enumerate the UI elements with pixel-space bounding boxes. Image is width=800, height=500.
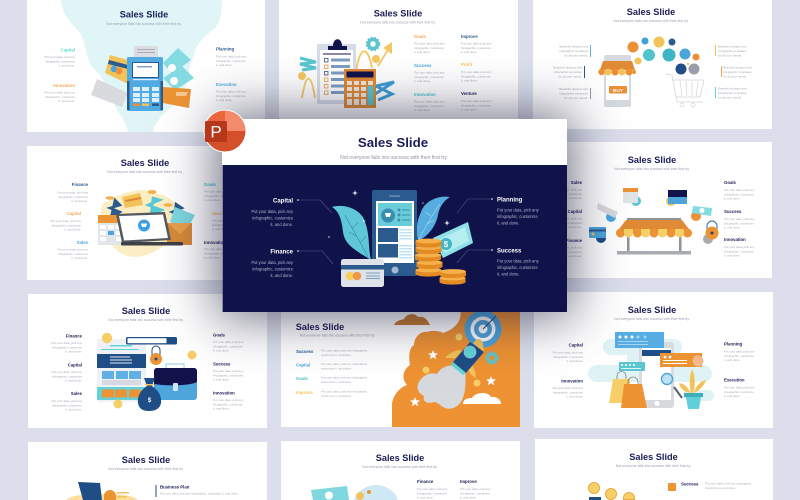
slide card: bottom right success: Not everyone falls into success with their first try. [616,464,691,468]
text: right labels: it, and done. [213,378,230,382]
text: Success: Put your data, pick any [497,258,540,264]
text: left labels: infographic, customize [58,252,88,256]
text: right labels: infographic, customize [212,223,242,227]
text: Innovation: Put your data, pick any [44,90,75,94]
slide card: bottom centre finance [281,441,520,500]
text: column one labels: it, and done. [414,108,431,112]
text: finance and improve: it, and done. [417,496,434,500]
slide card: top right online shop [533,0,772,129]
text: column one labels: Put your data, pick any [414,100,445,104]
text: right labels: it, and done. [204,198,221,202]
drop shadow behind main slide [222,119,567,312]
text: feature rows: Put your data, pick any infographic, [321,390,368,394]
text: column one labels: it, and done. [414,50,431,54]
text: Planning: Put your data, pick any [216,54,247,58]
text: Capital: it, and done. [270,222,293,227]
text: right labels: it, and done. [724,394,741,398]
text: column one labels: it, and done. [414,79,431,83]
text: right labels: infographic, customize [213,402,243,406]
text: column one labels: infographic, customize [414,104,444,108]
illustration: phone shop with bubbles and cart [598,36,704,107]
text: column one labels: infographic, customize [414,46,444,50]
text: column two labels: it, and done. [461,50,478,54]
text: right labels: infographic, customize [204,194,234,198]
text: column two labels: Put your data, pick any [461,42,492,46]
text: left labels: infographic, customize [552,221,582,225]
slide card: top centre clipboard and calculator [279,0,518,119]
text: left labels: infographic, customize [552,250,582,254]
text: Capital [251,198,294,227]
text: left notes: Beautiful designs and [559,44,588,48]
slide card: bottom right success [535,439,773,500]
text: left labels: it, and done. [65,378,82,382]
text: finance and improve [417,479,491,500]
slide card: lower right shopping reviews: Sales Slide [628,305,676,315]
illustration: laptop, calendar and envelope [98,190,195,257]
text: Capital: infographic, customize [45,59,75,63]
text: Innovation: infographic, customize [45,95,75,99]
slide card: top centre clipboard and calculator: Sales Slide [374,8,422,18]
text: right labels: infographic, customize [724,221,754,225]
text: left labels: Put your data, pick any [51,399,82,403]
text: left labels: infographic, customize [552,192,582,196]
text: column one labels [414,34,445,112]
text: left labels: infographic, customize [52,345,82,349]
text: right labels: infographic, customize [724,192,754,196]
text: feature rows: customize it, and done. [321,366,352,370]
text: left labels: Sales [571,180,583,185]
text: Finance [251,250,294,278]
text: Success [497,248,540,276]
illustration: payment terminal with cards and cash [91,46,194,111]
text: finance and improve: Improve [460,479,477,484]
slide card: top right online shop: Sales Slide [627,7,675,17]
slide card: middle right market stall [533,142,772,278]
text: column two labels: Profit [461,62,473,67]
text: right labels: Success [724,209,742,214]
illustration: cash and coins [311,485,398,500]
slide card: lower centre rocket [281,290,520,427]
text: left labels: Put your data, pick any [552,350,583,354]
text: feature rows: Put your data, pick any infographic, [321,376,368,380]
illustration: phone shop, leaves, card, cash and coins [328,190,473,287]
text: right labels: infographic, customize [213,344,243,348]
text: column one labels: Innovation [414,92,436,97]
slide card: bottom centre finance: Not everyone falls into success with their first try. [362,465,438,469]
text: left labels: it, and done. [71,256,88,260]
text: right notes: infographic templates [718,91,747,95]
text: left labels: it, and done. [566,359,583,363]
text: Execution: infographic, customize [216,94,246,98]
text: left labels: Finance [72,182,89,187]
illustration: phone shop, leaves, card, cash and coins: $ [444,240,449,249]
text: right labels: Innovation [204,240,226,245]
text: left labels: Put your data, pick any [51,370,82,374]
text: column two labels: Put your data, pick any [461,70,492,74]
illustration: website, briefcase and money bag: $ [148,398,152,404]
text: left labels: Capital [568,209,582,214]
slide card: bottom left business plan [28,442,267,500]
slide card: lower right shopping reviews [534,292,773,428]
slide card: bottom right success: Sales Slide [629,452,678,462]
text: right labels: Put your data, pick any [213,398,244,402]
text: Execution: Put your data, pick any [216,90,247,94]
text: column two labels: it, and done. [461,108,478,112]
slide card: middle left laptop: Sales Slide [121,158,169,168]
text: Capital: Put your data, pick any [251,209,294,214]
text: right labels [213,332,244,410]
illustration: clipboard, calculator and growth arrow [298,38,394,108]
text: feature rows [296,348,368,398]
text: column two labels: infographic, customize [461,103,491,107]
text: Execution [216,82,247,102]
text: left labels: infographic, customize [553,390,583,394]
text: left labels [552,342,583,398]
text: column one labels: Put your data, pick any [414,70,445,74]
text: left notes: infographic templates [559,92,588,96]
text: Execution: it, and done. [216,98,233,102]
text: left labels: it, and done. [71,199,88,203]
slide card: middle left laptop [27,146,265,280]
text: left labels: it, and done. [65,350,82,354]
text: Capital: infographic, customize [252,216,294,220]
slide card: middle right market stall: Sales Slide [628,155,676,165]
text: column one labels: Goals [414,34,427,39]
text: Finance: Put your data, pick any [251,260,294,265]
text: column one labels: Put your data, pick any [414,42,445,46]
illustration: stall with icons around it [589,188,718,254]
text: Finance: Finance [270,250,294,256]
text: left labels: Put your data, pick any [551,246,582,250]
text: business plan: Put your data, pick any infographic, customize it, and done. [160,492,239,496]
text: feature rows: Put your data, pick any infographic, [321,348,368,352]
text: left labels: it, and done. [64,228,81,232]
text: left labels: Capital [68,362,82,368]
slide card: middle right market stall: Not everyone falls into success with their first try. [614,167,690,171]
text: column one labels: Success [414,63,432,68]
illustration: phone shop with bubbles and cart: BUY [613,88,624,94]
text: right notes: Beautiful designs and [718,44,747,48]
text: right labels: Success [212,211,230,216]
text: right labels: Innovation [213,390,235,396]
text: right labels: Put your data, pick any [724,350,755,354]
text: right labels: it, and done. [724,254,741,258]
slide card: lower left website and briefcase [28,294,267,428]
text: left labels: it, and done. [565,196,582,200]
text: column two labels [461,34,492,112]
text: Planning: it, and done. [497,220,520,226]
text: Innovation: it, and done. [58,99,75,103]
text: left notes: Beautiful designs and [553,66,582,70]
text: left notes: infographic templates [553,70,582,74]
text: feature rows: customize it, and done. [321,380,352,384]
text: left labels: infographic, customize [553,355,583,359]
text: right labels: Put your data, pick any [724,386,755,390]
text: left notes: for all your needs. [564,54,588,58]
text: right labels: Put your data, pick any [212,218,243,222]
text: right labels: infographic, customize [724,390,754,394]
slide card: bottom left business plan: Sales Slide [122,455,170,465]
text: left labels: it, and done. [565,225,582,229]
text: success row [668,482,752,491]
text: Execution: Execution [216,82,237,87]
text: right labels: Put your data, pick any [724,245,755,249]
text: right labels: Goals [213,332,226,338]
slide card: middle left laptop: Not everyone falls into success with their first try. [107,170,183,174]
slide card: top centre clipboard and calculator: Not everyone falls into success with their first try. [360,20,436,24]
text: left labels: Capital [67,211,81,216]
text: feature rows: Success [296,349,314,354]
illustration: plan document and coin [66,482,138,500]
subtitle: Not everyone falls into success with their first try. [340,155,448,161]
text: right notes: for all your needs. [718,96,742,100]
text: feature rows: Put your data, pick any infographic, [321,362,368,366]
text: left labels: infographic, customize [51,223,81,227]
text: finance and improve: Put your data, pick any [460,487,491,491]
text: column two labels: infographic, customize [461,74,491,78]
panel: main featured slide [222,119,567,312]
text: left labels: infographic, customize [52,374,82,378]
text: Planning [497,198,540,226]
text: left labels: Put your data, pick any [551,188,582,192]
text: Planning: Planning [497,198,523,204]
text: right labels: Put your data, pick any [213,340,244,344]
slide card: top left payment terminal: Not everyone falls into success with their first try. [106,22,182,26]
illustration: phone with reviews, bags and plant [588,332,714,409]
text: right labels: Goals [724,180,737,185]
text: Success: it, and done. [497,272,520,276]
text: left notes: for all your needs. [558,74,582,78]
text: left labels: infographic, customize [58,195,88,199]
text: right labels [724,342,755,398]
text: left labels: Sales [71,391,83,396]
text: success row: Put your data, pick any infographic, [705,482,752,486]
text: right labels: Put your data, pick any [724,217,755,221]
slide card: top left payment terminal [27,0,265,132]
text: right labels: it, and done. [213,348,230,352]
text: Planning: Planning [216,46,235,52]
text: left labels: Put your data, pick any [57,248,88,252]
text: right labels: it, and done. [724,226,741,230]
text: Innovation: Innovation [53,83,75,88]
text: left labels: it, and done. [65,408,82,412]
text: finance and improve: infographic, customize [417,491,447,495]
text: Finance: it, and done. [270,273,293,278]
text: right labels: infographic, customize [204,251,234,255]
text: left labels: Put your data, pick any [50,219,81,223]
text: left labels: it, and done. [565,254,582,258]
text: right labels: Innovation [724,237,746,242]
slide card: bottom centre finance: Sales Slide [376,453,424,463]
text: right notes: Beautiful designs and [718,86,747,90]
slide card: lower centre rocket: Not everyone falls into success with their first try. [300,334,375,338]
text: left labels: Finance [566,238,583,243]
text: left labels [551,180,583,258]
connector lines [297,198,493,264]
text: success row: customize it, and done. [705,486,736,490]
text: column two labels: Put your data, pick any [461,99,492,103]
text: left labels: Finance [66,334,83,338]
text: right labels: it, and done. [724,196,741,200]
text: left labels: Sales [77,240,89,245]
text: left notes: Beautiful designs and [559,87,588,91]
text: right notes: infographic templates [718,49,747,53]
text: Capital: it, and done. [58,64,75,68]
title: Sales Slide [358,135,428,150]
text: left labels: Put your data, pick any [51,341,82,345]
text: right notes: for all your needs. [718,54,742,58]
text: feature rows: customize it, and done. [321,394,352,398]
text: feature rows: Improve [296,390,313,395]
slide card: bottom left business plan: Not everyone falls into success with their first try. [108,467,184,471]
text: Planning: Put your data, pick any [497,208,540,212]
text: right labels: Goals [204,182,217,187]
text: right notes: infographic templates [723,70,752,74]
text: business plan [156,484,239,497]
text: business plan: Business Plan [160,484,190,490]
icon: PowerPoint badge: P [210,122,222,142]
text: right labels: Put your data, pick any [204,190,235,194]
icon: PowerPoint badge [204,110,246,152]
text: finance and improve: Put your data, pick any [417,487,448,491]
text: left notes: infographic templates [559,49,588,53]
text: column two labels: Venture [461,91,477,96]
text: right labels: infographic, customize [724,249,754,253]
text: column two labels: it, and done. [461,78,478,82]
text: feature rows: Goals [296,376,309,381]
text: left notes [553,44,591,100]
illustration: website, briefcase and money bag [97,333,197,411]
text: Capital: Capital [61,48,75,52]
text: Planning: infographic, customize [216,59,246,63]
text: column one labels: infographic, customize [414,75,444,79]
text: success row: Success [681,482,699,486]
text: right labels [724,180,755,258]
text: right notes: for all your needs. [723,74,747,78]
text: right labels: Success [213,362,231,366]
text: Planning [216,46,247,67]
text: left labels: Capital [569,342,583,348]
text: Planning: it, and done. [216,63,233,67]
slide card: lower right shopping reviews: Not everyone falls into success with their first try. [614,317,690,321]
text: right notes [715,44,752,100]
text: left labels [51,334,83,412]
text: left labels: it, and done. [566,394,583,398]
text: Innovation [44,83,75,103]
text: left labels: Innovation [561,378,583,384]
text: right labels: it, and done. [213,406,230,410]
text: finance and improve: Finance [417,479,434,484]
text: right labels: it, and done. [204,256,221,260]
text: left notes: for all your needs. [564,96,588,100]
text: left labels: Put your data, pick any [551,216,582,220]
text: right labels: Put your data, pick any [213,369,244,373]
text: left labels [50,182,89,260]
text: finance and improve: it, and done. [460,496,477,500]
text: right labels: infographic, customize [724,354,754,358]
text: left labels: infographic, customize [52,403,82,407]
text: left labels: Put your data, pick any [57,190,88,194]
text: Finance: infographic, customize [252,266,294,272]
text: Planning: infographic, customize [497,214,538,219]
text: right labels: it, and done. [212,227,229,231]
text: Capital: Put your data, pick any [44,55,75,59]
text: Success: Success [497,248,522,254]
text: feature rows: customize it, and done. [321,353,352,357]
slide card: lower left website and briefcase: Sales Slide [122,306,170,316]
text: Capital: Capital [273,198,293,204]
illustration: rocket, target and clouds [394,310,502,409]
text: right labels: Planning [724,342,743,346]
text: left labels: Put your data, pick any [552,386,583,390]
slide card: top right online shop: Not everyone falls into success with their first try. [613,19,689,23]
text: right labels: Put your data, pick any [204,247,235,251]
illustration: coins [588,482,634,500]
text: Capital [44,48,75,68]
text: right labels: it, and done. [724,358,741,362]
text: right notes: Beautiful designs and [723,66,752,70]
text: column two labels: Improve [461,34,478,39]
slide card: lower centre rocket: Sales Slide [296,322,344,332]
slide card: top left payment terminal: Sales Slide [120,10,168,20]
text: right labels: Execution [724,378,745,382]
text: right labels: Put your data, pick any [724,188,755,192]
text: column two labels: infographic, customize [461,46,491,50]
slide card: lower left website and briefcase: Not everyone falls into success with their first try. [108,318,184,322]
text: right labels [204,182,243,260]
text: finance and improve: infographic, customize [460,491,490,495]
text: feature rows: Capital [296,362,310,368]
text: right labels: infographic, customize [213,373,243,377]
text: Success: infographic, customize [497,265,538,270]
